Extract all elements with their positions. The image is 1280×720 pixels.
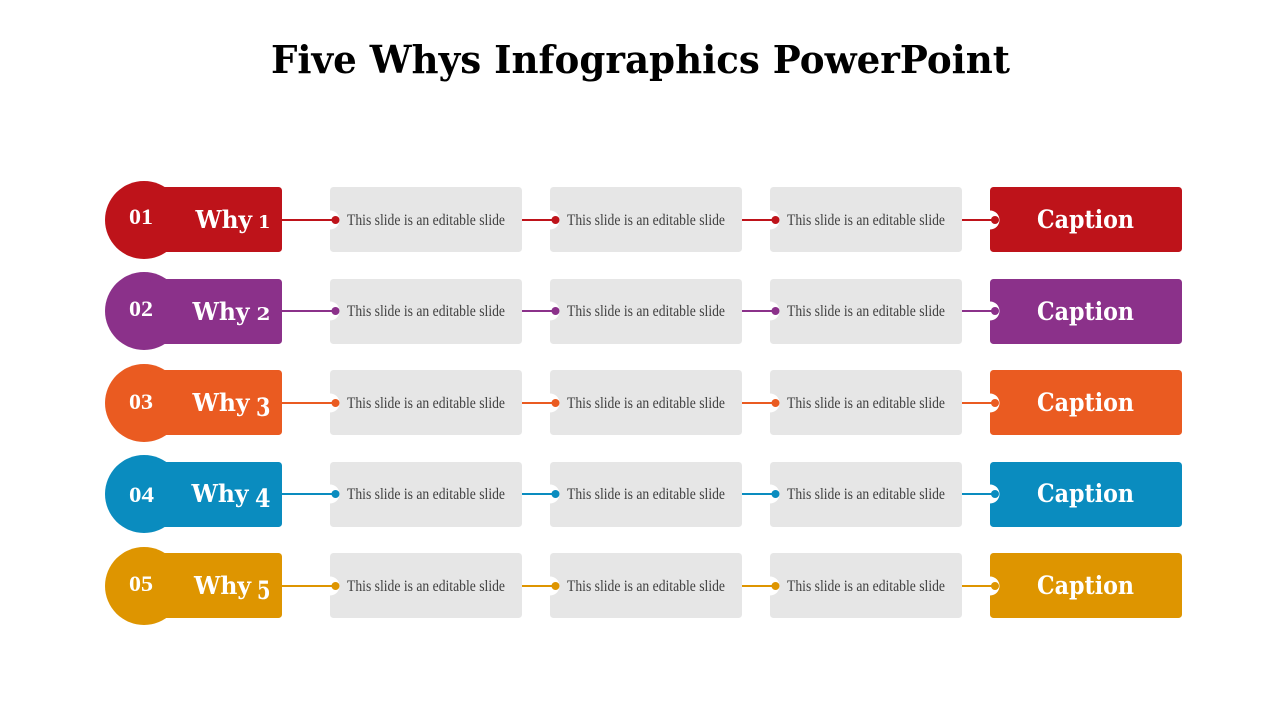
caption 5: Caption bbox=[1037, 571, 1134, 600]
title: Five Whys Infographics PowerPoint bbox=[271, 38, 1010, 83]
connectors 5 bbox=[282, 582, 999, 590]
why tab 1: 1 bbox=[258, 212, 270, 233]
text box 2-1: This slide is an editable slide bbox=[347, 303, 505, 320]
text box 1-2: This slide is an editable slide bbox=[567, 212, 725, 229]
connectors 1 bbox=[282, 216, 999, 224]
connectors 4 bbox=[282, 490, 999, 498]
text box 1-3 bbox=[760, 187, 962, 252]
text box 4-2: This slide is an editable slide bbox=[567, 486, 725, 503]
why tab 5: 05 bbox=[129, 571, 153, 596]
row 3 bbox=[105, 364, 1182, 442]
why tab 4: 04 bbox=[129, 482, 154, 507]
text box 4-1: This slide is an editable slide bbox=[347, 486, 505, 503]
text box 4-2 bbox=[540, 462, 742, 527]
text box 4-3: This slide is an editable slide bbox=[787, 486, 945, 503]
text box 5-3 bbox=[760, 553, 962, 618]
caption 4: Caption bbox=[1037, 479, 1134, 508]
text box 3-1: This slide is an editable slide bbox=[347, 395, 505, 412]
why tab 5: Why bbox=[193, 571, 252, 600]
why tab 3 bbox=[105, 364, 282, 442]
caption 1: Caption bbox=[1037, 205, 1134, 234]
why tab 3: 3 bbox=[256, 393, 270, 422]
connectors 3 bbox=[282, 399, 999, 407]
text box 1-2 bbox=[540, 187, 742, 252]
why tab 2 bbox=[105, 272, 282, 350]
caption 1 bbox=[980, 187, 1182, 252]
why tab 2: 2 bbox=[256, 304, 270, 325]
why tab 4: Why bbox=[191, 479, 250, 508]
why tab 4 bbox=[105, 455, 282, 533]
why tab 3: 03 bbox=[129, 389, 153, 414]
why tab 3: Why bbox=[192, 388, 251, 417]
text box 4-3 bbox=[760, 462, 962, 527]
text box 3-2 bbox=[540, 370, 742, 435]
caption 2 bbox=[980, 279, 1182, 344]
text box 3-3 bbox=[760, 370, 962, 435]
text box 5-1 bbox=[320, 553, 522, 618]
caption 3 bbox=[980, 370, 1182, 435]
text box 5-2: This slide is an editable slide bbox=[567, 578, 725, 595]
row 1 bbox=[105, 181, 1182, 259]
why tab 4: 4 bbox=[255, 484, 270, 513]
row 5 bbox=[105, 547, 1182, 625]
text box 1-3: This slide is an editable slide bbox=[787, 212, 945, 229]
why tab 2: 02 bbox=[129, 296, 153, 321]
text box 1-1 bbox=[320, 187, 522, 252]
why tab 5: 5 bbox=[257, 576, 270, 605]
caption 4 bbox=[980, 462, 1182, 527]
why tab 1: 01 bbox=[129, 204, 153, 229]
text box 5-3: This slide is an editable slide bbox=[787, 578, 945, 595]
caption 2: Caption bbox=[1037, 297, 1134, 326]
text box 5-1: This slide is an editable slide bbox=[347, 578, 505, 595]
why tab 1 bbox=[105, 181, 282, 259]
why tab 2: Why bbox=[192, 297, 251, 326]
caption 5 bbox=[980, 553, 1182, 618]
row 2 bbox=[105, 272, 1182, 350]
text box 4-1 bbox=[320, 462, 522, 527]
text box 2-3: This slide is an editable slide bbox=[787, 303, 945, 320]
connectors 2 bbox=[282, 307, 999, 315]
text box 3-3: This slide is an editable slide bbox=[787, 395, 945, 412]
text box 3-1 bbox=[320, 370, 522, 435]
why tab 5 bbox=[105, 547, 282, 625]
text box 3-2: This slide is an editable slide bbox=[567, 395, 725, 412]
text box 2-1 bbox=[320, 279, 522, 344]
caption 3: Caption bbox=[1037, 388, 1134, 417]
text box 1-1: This slide is an editable slide bbox=[347, 212, 505, 229]
text box 2-2: This slide is an editable slide bbox=[567, 303, 725, 320]
text box 5-2 bbox=[540, 553, 742, 618]
text box 2-3 bbox=[760, 279, 962, 344]
row 4 bbox=[105, 455, 1182, 533]
text box 2-2 bbox=[540, 279, 742, 344]
why tab 1: Why bbox=[195, 205, 253, 234]
